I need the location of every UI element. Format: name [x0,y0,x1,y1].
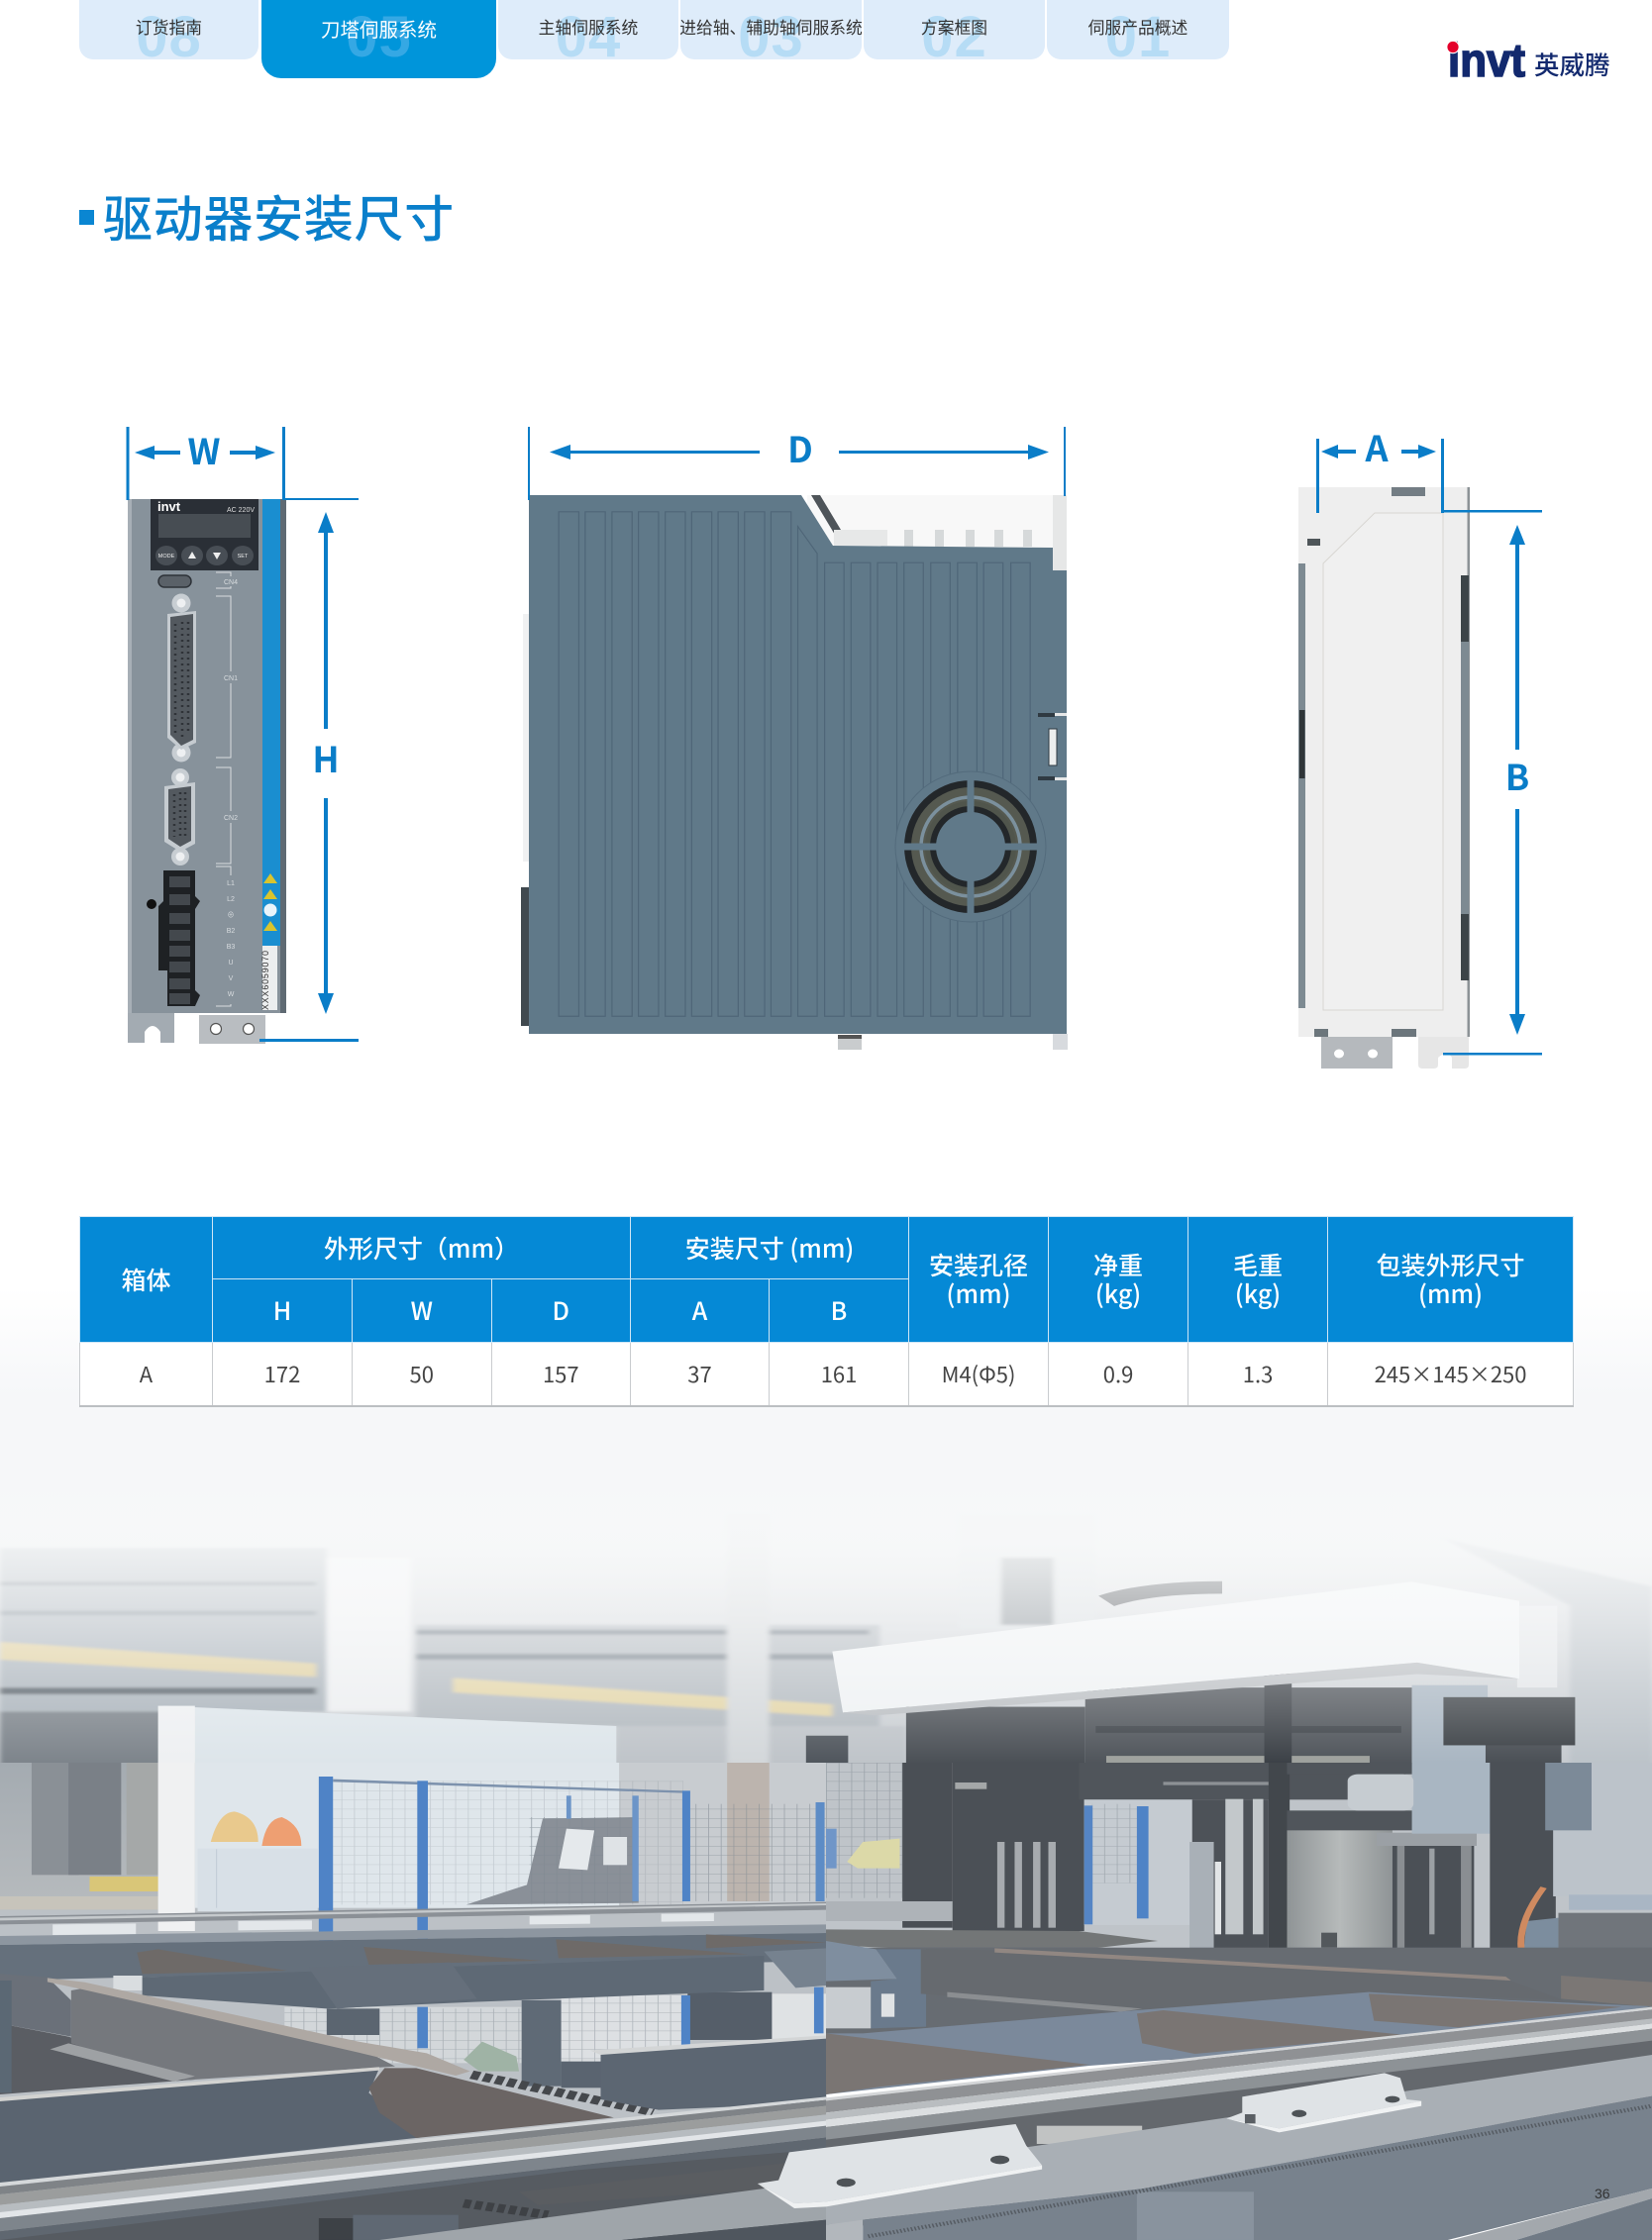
connector labels: V [229,975,234,982]
table: installation dimensions: H [273,1292,291,1328]
dimension D: D [787,422,813,473]
logo: invt [1447,34,1610,86]
table: installation dimensions: A [692,1292,707,1328]
control panel: AC 220V [227,507,255,514]
diagram: front view W × H [127,424,359,1044]
nav tab: 方案框图 [864,0,1045,59]
table: installation dimensions: 0.9 [1103,1358,1133,1389]
table: installation dimensions: M4(Φ5) [942,1358,1015,1389]
diagram: side view D [521,422,1068,1050]
table: installation dimensions: 包装外形尺寸 [1377,1247,1525,1282]
nav tab: 刀塔伺服系统 (active): 刀塔伺服系统 [321,20,437,42]
connector labels: B3 [227,944,235,951]
table: installation dimensions: 1.3 [1243,1358,1273,1389]
side clip [1038,713,1067,780]
heading: 驱动器安装尺寸: 驱动器安装尺寸 [103,180,455,252]
nav tab: 进给轴、辅助轴伺服系统 [680,0,862,59]
page number: 36 [1595,2186,1610,2201]
power terminal [158,870,200,1006]
table: installation dimensions: D [553,1292,569,1328]
aluminium clamp: right [1226,2073,1421,2132]
cooling fan [895,771,1046,922]
table: installation dimensions: 37 [687,1358,712,1389]
table: installation dimensions: 245×145×250 [1375,1358,1526,1389]
dimension B: B [1505,750,1529,801]
table: installation dimensions: 净重 [1093,1247,1143,1282]
under-beam fence openings [284,1987,826,2087]
dimension W: W [188,424,221,475]
table: installation dimensions: 毛重 [1233,1247,1283,1282]
scene: lower left foreground [0,1763,826,2240]
connector labels: L1 [227,880,235,887]
nav tab: 刀塔伺服系统 (active): 05 [346,5,412,69]
table: installation dimensions: (kg) [1235,1275,1281,1311]
logo: invt: invt [1448,34,1525,86]
connector labels: U [228,960,234,967]
table: installation dimensions: B [831,1292,847,1328]
connector labels: W [228,991,235,998]
connector labels: CN1 [224,675,238,682]
background: factory photo scene [0,1287,1652,2240]
table: installation dimensions: 安装孔径 [929,1247,1028,1282]
table: installation dimensions: 172 [264,1358,300,1389]
aluminium clamp: left [758,2124,1042,2208]
table: installation dimensions: 50 [410,1358,434,1389]
diagram: front view W × H: XXX6059070 [260,951,270,1010]
dimension D [528,422,1066,500]
dimension W [127,424,285,500]
dimension B [1442,510,1542,1056]
dimension A: A [1364,421,1389,472]
table: installation dimensions: 161 [821,1358,857,1389]
nav tab: 伺服产品概述: 伺服产品概述 [1088,19,1187,38]
nav tab: 订货指南: 订货指南 [136,19,202,38]
control panel: MODE [158,554,175,560]
table: installation dimensions: (mm) [1418,1275,1483,1311]
connector CN2 [164,768,195,865]
connector labels: L2 [227,896,235,903]
scene: lower right foreground [758,1763,1652,2240]
connector labels: CN2 [224,815,238,822]
table: installation dimensions: 157 [543,1358,579,1389]
table: installation dimensions: 安装尺寸 (mm) [685,1230,854,1266]
machine gantry upper [806,1581,1575,1803]
connector labels [216,572,242,1006]
connector labels: ⊕ [228,911,234,919]
table: installation dimensions: W [411,1292,433,1328]
table: installation dimensions [79,1216,1574,1407]
rear mounting brackets [1321,1037,1469,1069]
nav tab: 方案框图: 方案框图 [921,19,987,38]
table: installation dimensions: 箱体 [121,1262,170,1297]
nav tab: 订货指南 [79,0,258,59]
nav tab: 主轴伺服系统 [498,0,678,59]
connector labels: B2 [227,928,235,935]
diagram: rear view A × B [1298,421,1542,1069]
logo: invt: 英威腾 [1534,46,1610,82]
dimension A [1316,421,1444,513]
table: installation dimensions: 外形尺寸（mm） [324,1230,519,1266]
dimension H [259,498,359,1042]
warning icons [263,873,277,931]
control panel: invt [157,499,181,514]
nav tab: 主轴伺服系统: 主轴伺服系统 [539,19,638,38]
control panel: SET [238,554,249,560]
table: installation dimensions: (kg) [1095,1275,1141,1311]
table: installation dimensions: A [140,1358,153,1389]
control panel [151,499,258,570]
dimension H: H [312,732,340,783]
nav tab: 伺服产品概述 [1047,0,1229,59]
mounting brackets [128,1013,265,1044]
nav tab: 进给轴、辅助轴伺服系统: 进给轴、辅助轴伺服系统 [680,19,862,38]
heat sink ribs [559,512,1030,1016]
connector labels: CN4 [224,579,238,586]
safety helmets [211,1811,301,1846]
nav tab: 刀塔伺服系统 (active) [261,0,496,78]
connector CN1 [167,594,196,763]
table: installation dimensions: (mm) [947,1275,1010,1311]
